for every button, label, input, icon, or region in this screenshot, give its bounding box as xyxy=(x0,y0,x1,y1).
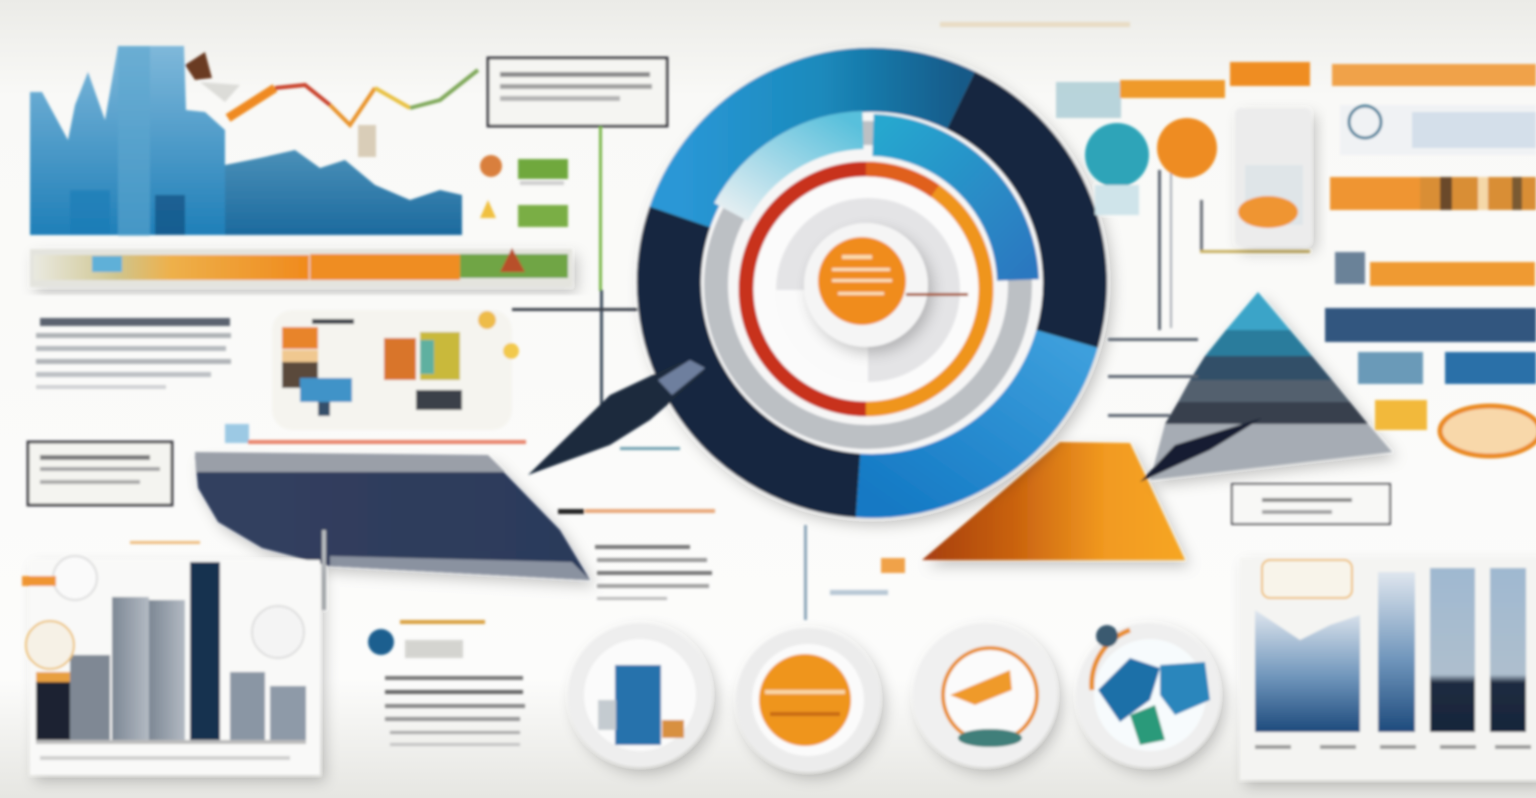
small info card top right xyxy=(1340,105,1536,155)
document card xyxy=(1235,108,1311,246)
dark connector xyxy=(600,290,603,420)
badge: orange ring arrow xyxy=(913,623,1057,767)
top red-orange blend xyxy=(866,169,935,191)
bottom right bar chart xyxy=(1240,558,1536,780)
bottom left bar chart xyxy=(22,541,320,775)
grey bottom band on navy banner xyxy=(330,556,590,580)
list text block with icon xyxy=(368,620,525,746)
badge: orange globe xyxy=(736,628,880,772)
outlined callout right xyxy=(1232,484,1390,524)
navy header right xyxy=(1325,308,1536,342)
yellow tile xyxy=(1375,400,1427,430)
second ring: grey xyxy=(716,133,1020,437)
badge: building xyxy=(568,623,712,767)
center text block lower xyxy=(595,545,712,600)
striped orange band xyxy=(1330,177,1536,210)
dark arrow left xyxy=(528,362,705,475)
green labels with icons xyxy=(480,155,568,227)
white gap disc xyxy=(738,161,994,417)
centre pointer xyxy=(906,293,968,296)
line chart zigzag xyxy=(185,52,478,157)
small orange tag xyxy=(830,558,905,595)
navy banner shape xyxy=(195,456,590,580)
orange bubble xyxy=(1157,118,1217,178)
wide banner xyxy=(30,248,572,287)
orange label right xyxy=(1335,252,1535,286)
arrow highlight xyxy=(658,360,705,395)
red rule with tab xyxy=(225,424,526,444)
connector lines middle xyxy=(512,308,807,620)
right connectors xyxy=(1108,170,1310,417)
dark arrow right xyxy=(1140,418,1262,482)
chart bubbles xyxy=(53,556,97,600)
top right orange bars xyxy=(940,22,1536,118)
outer ring: navy right xyxy=(961,100,1075,339)
grey top band on navy banner xyxy=(195,452,505,472)
left text block xyxy=(36,318,231,389)
blue pyramid xyxy=(1150,292,1392,480)
blue tiles xyxy=(1358,352,1536,384)
grey inner disc xyxy=(776,198,960,382)
outer ring: blue top xyxy=(680,80,961,217)
callout box top xyxy=(488,58,667,126)
small icon cluster xyxy=(272,310,519,430)
orange pyramid xyxy=(922,442,1185,560)
connector from navy banner xyxy=(322,530,326,610)
green connector xyxy=(599,126,602,291)
callout box left xyxy=(28,442,172,505)
second ring: blue segment xyxy=(873,135,1018,280)
orange ring arc xyxy=(866,169,986,409)
red ring arc xyxy=(746,169,866,409)
teal bubble xyxy=(1085,123,1149,215)
centre text lines xyxy=(832,255,892,295)
second ring: light segment xyxy=(731,130,863,212)
inner white disc xyxy=(700,111,1044,455)
top left blue area chart xyxy=(30,46,462,236)
white halo xyxy=(804,223,928,347)
outer ring: blue bottom xyxy=(858,339,1067,486)
orange cloud label xyxy=(1440,406,1536,456)
badge: world map xyxy=(1076,623,1220,767)
main ring chart xyxy=(636,47,1108,519)
outer ring: navy left xyxy=(669,217,858,486)
white inner quadrant xyxy=(776,290,868,382)
centre orange circle xyxy=(818,237,906,325)
